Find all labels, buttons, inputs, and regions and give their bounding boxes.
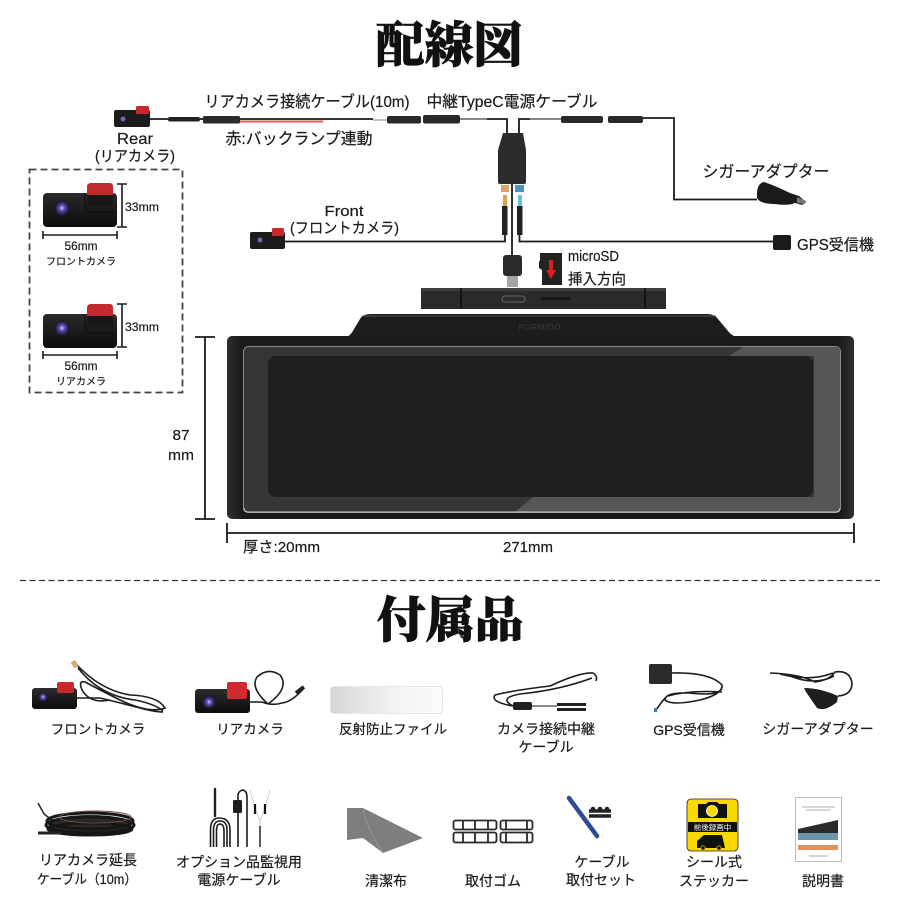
accessory: optional monitoring power cable: 電源ケーブル: [197, 872, 281, 888]
front camera dimensions: [43, 183, 159, 268]
accessory: cigar adapter: シガーアダプター: [762, 721, 874, 737]
dimension: thickness: 厚さ:20mm: [243, 539, 320, 556]
rear camera connection cable: [150, 115, 507, 133]
cigar adapter label: シガーアダプター: [702, 163, 830, 181]
accessory: GPS receiver: [649, 664, 725, 738]
accessory: optional monitoring power cable: オプション品監視用: [176, 854, 302, 870]
relay junction box: [498, 133, 526, 255]
accessory: rear camera extension cable: リアカメラ延長: [39, 852, 137, 868]
dimension: width 271 mm: [227, 523, 854, 556]
microSD card and insert direction: 挿入方向: [568, 271, 626, 288]
panel: camera dimensions: [30, 170, 182, 392]
accessory: rear camera extension cable: [37, 803, 137, 887]
accessory: manual: 説明書: [802, 873, 844, 889]
wiring diagram: rear camera: Rear: [117, 131, 154, 148]
accessory: rear camera: リアカメラ: [216, 722, 284, 737]
accessory: anti-glare film: 反射防止ファイル: [339, 722, 447, 737]
front camera dimensions: 56mm: [64, 239, 98, 253]
cable label: red reverse lamp: 赤:バックランプ連動: [226, 130, 372, 148]
accessory: sticker: 前後録画中: [694, 822, 731, 832]
rear camera dimensions: リアカメラ: [56, 376, 106, 388]
accessory: cable mounting set: 取付セット: [566, 872, 636, 888]
accessory: cable mounting set: ケーブル: [574, 854, 630, 870]
cable label: rear camera connection: リアカメラ接続ケーブル(10m): [204, 92, 410, 111]
microSD card and insert direction: microSD: [568, 248, 619, 265]
mirror top edge view: [421, 288, 666, 309]
wiring diagram: rear camera: [95, 106, 175, 165]
dimension: height 87 mm: 87: [172, 427, 190, 444]
accessory: cable mounting set: [566, 798, 636, 888]
rear camera dimensions: [43, 304, 159, 388]
accessory: cleaning cloth: [347, 808, 423, 889]
GPS receiver: [520, 235, 874, 254]
rear camera dimensions: 33mm: [125, 320, 159, 334]
microSD card and insert direction: [539, 248, 626, 288]
wiring diagram: rear camera: (リアカメラ): [95, 148, 175, 165]
accessory: front camera: [32, 660, 165, 737]
accessory: rear camera: [195, 671, 305, 737]
accessory: sticker: シール式: [686, 854, 742, 870]
accessory: cleaning cloth: 清潔布: [365, 873, 407, 889]
accessory: mounting rubber: 取付ゴム: [465, 873, 521, 889]
title: wiring diagram: 配線図: [375, 18, 523, 73]
front camera dimensions: フロントカメラ: [46, 256, 116, 268]
accessory: GPS receiver: GPS受信機: [653, 722, 725, 738]
icon: cigar adapter: [757, 182, 806, 205]
section divider: [20, 580, 880, 582]
cable label: relay Type-C power: 中継TypeC電源ケーブル: [426, 92, 598, 111]
accessory: anti-glare film: [330, 686, 447, 737]
accessory: camera relay cable: カメラ接続中継: [497, 721, 595, 737]
accessory: camera relay cable: ケーブル: [518, 739, 574, 755]
dimension: width 271 mm: 271mm: [503, 539, 553, 556]
accessory: rear camera extension cable: ケーブル（10m）: [37, 871, 137, 887]
Type-C plug: [503, 255, 522, 287]
mirror body: PORMIDO: [519, 323, 561, 332]
accessory: optional monitoring power cable: [176, 789, 302, 888]
dimension: height 87 mm: mm: [168, 447, 194, 464]
accessory: mounting rubber: [454, 820, 532, 889]
GPS receiver: GPS受信機: [797, 236, 874, 254]
title: accessories: 付属品: [376, 593, 524, 648]
accessory: cigar adapter: [762, 672, 874, 737]
accessory: front camera: フロントカメラ: [51, 722, 145, 737]
front camera and cable: (フロントカメラ): [290, 220, 399, 237]
accessory: sticker: [679, 799, 749, 889]
dimension: height 87 mm: [168, 337, 215, 519]
accessory: sticker: ステッカー: [679, 873, 749, 889]
front camera and cable: Front: [324, 203, 364, 220]
rear camera dimensions: 56mm: [64, 359, 98, 373]
front camera and cable: [250, 203, 505, 249]
cigar adapter cable: [519, 116, 757, 200]
accessory: camera relay cable: [494, 673, 597, 755]
front camera dimensions: 33mm: [125, 200, 159, 214]
mirror body: [227, 314, 854, 519]
accessory: manual: [796, 798, 844, 889]
